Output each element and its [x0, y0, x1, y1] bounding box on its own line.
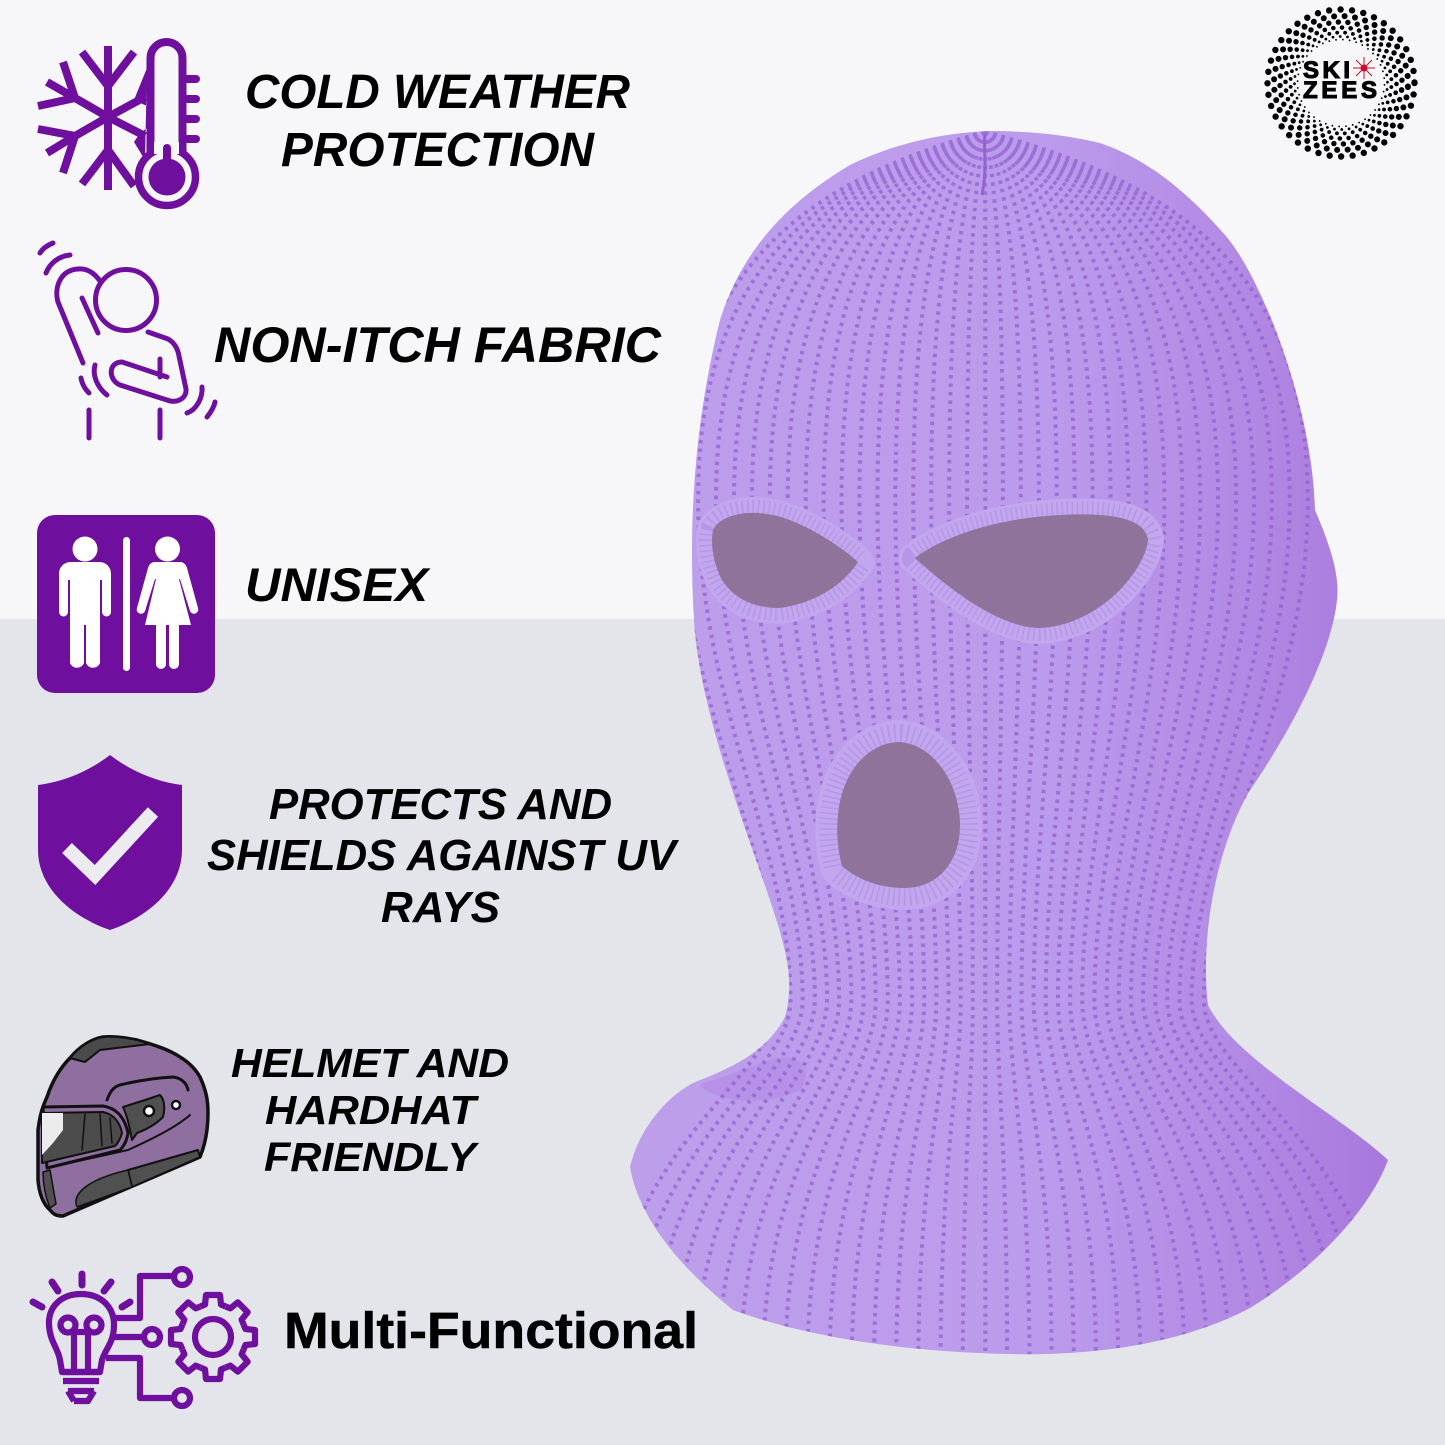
feature 3 text: UNISEX: [245, 558, 431, 611]
feature 4 text: PROTECTS AND: [269, 780, 612, 829]
feature 1 text: [245, 66, 630, 177]
feature 4 icon: shield with check: [38, 755, 182, 930]
background: upper light band: [0, 0, 1445, 620]
feature 4 text: RAYS: [381, 883, 500, 932]
feature 2 icon: scratching figure: [40, 243, 215, 438]
feature 1 icon: snowflake and thermometer: [38, 42, 196, 206]
feature 6 text: Multi-Functional: [284, 1302, 698, 1359]
background: lower grey band: [0, 619, 1445, 1445]
feature 5 icon: helmet: [38, 1037, 208, 1216]
mouth opening: [837, 742, 960, 888]
right eye opening: [915, 514, 1148, 628]
feature 5 text: HARDHAT: [265, 1087, 479, 1133]
feature 2 text: NON-ITCH FABRIC: [214, 317, 662, 373]
feature 6 icon: bulb, circuit and gear: [33, 1269, 255, 1406]
product photo: lavender balaclava: [607, 131, 1388, 1370]
feature 5 text: FRIENDLY: [264, 1134, 480, 1180]
logo: Ski Zees: [1268, 10, 1414, 156]
logo wordmark: ZEES: [1303, 77, 1377, 104]
left eye opening: [712, 513, 858, 608]
feature 4 text: [207, 780, 680, 932]
logo wordmark: [1303, 57, 1377, 104]
logo wordmark: SKI: [1303, 57, 1350, 84]
feature 3 icon: unisex sign: [37, 515, 215, 693]
feature 5 text: [231, 1040, 509, 1180]
eye and mouth rims: [712, 513, 1148, 888]
logo star: [1353, 57, 1375, 79]
feature 4 text: SHIELDS AGAINST UV: [207, 831, 680, 880]
feature 5 text: HELMET AND: [231, 1040, 509, 1086]
feature 1 text: PROTECTION: [281, 124, 595, 177]
feature 1 text: COLD WEATHER: [245, 66, 630, 119]
